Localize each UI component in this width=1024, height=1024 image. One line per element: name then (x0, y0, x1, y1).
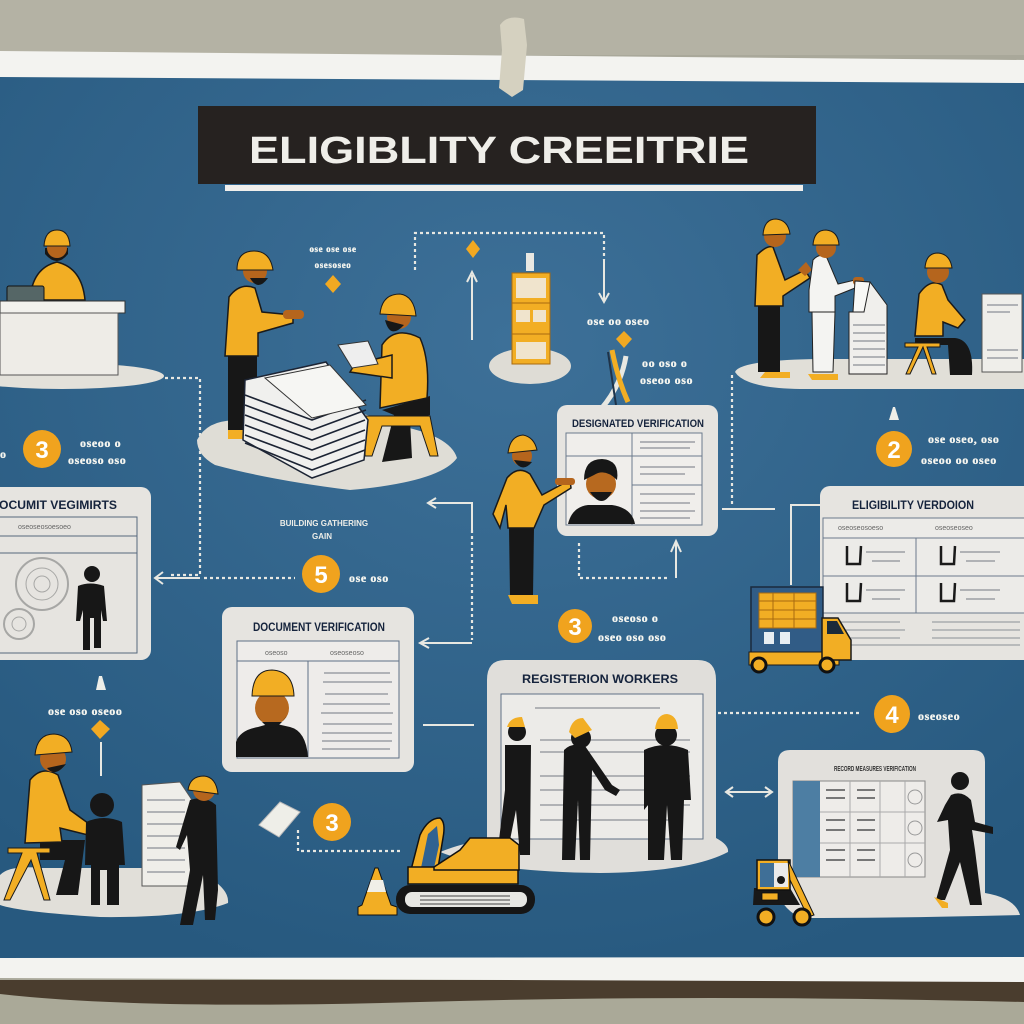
step 2 marker: ose oseo, oso (928, 432, 999, 446)
bottom-left captions and arrow (48, 676, 122, 718)
scissors tool and captions: oseoo oso (640, 373, 693, 387)
tape (499, 17, 527, 97)
panel: document verification (222, 607, 414, 772)
step 5 marker: ose oso (349, 571, 389, 585)
step 3 center marker: oseoso o (612, 611, 658, 625)
standing worker by card (493, 435, 575, 604)
excavator (396, 818, 535, 914)
step 4 marker: oseoseo (918, 709, 960, 723)
sitting worker (338, 294, 438, 462)
left step 3 marker: o (0, 447, 7, 461)
step 2 marker (876, 407, 999, 467)
connector arrows (101, 233, 862, 851)
standing silhouette worker (176, 776, 218, 925)
right three workers scene (735, 219, 1024, 389)
step 3 lower marker (313, 803, 351, 841)
traffic cone (358, 868, 397, 915)
child silhouette (85, 793, 125, 905)
panel: registration workers (440, 660, 728, 873)
small note above workers: ose ose ose (309, 244, 357, 254)
small center caption: GAIN (312, 532, 332, 541)
document (142, 782, 192, 886)
panel: worker records: RECORD MEASURES VERIFICATION (834, 766, 916, 773)
standing worker (225, 251, 304, 439)
step 3 center marker (558, 609, 667, 644)
panel: document requirements: OCUMIT VEGIMIRTS (0, 498, 117, 512)
panel: document verification: oseoso (265, 650, 288, 657)
small center caption: BUILDING GATHERING (280, 519, 368, 528)
center paper pile scene (197, 251, 457, 490)
bottom-left captions and arrow: ose oso oseoo (48, 704, 122, 718)
step 3 center marker: 3 (568, 614, 582, 641)
small note above workers: osesoseo (315, 260, 351, 270)
step 3 center marker: oseo oso oso (598, 630, 667, 644)
step 2 marker: 2 (887, 437, 901, 464)
panel: eligibility verification: oseoseosoeso (838, 525, 883, 532)
panel: designated verification: DESIGNATED VERIFICATION (572, 418, 704, 430)
title banner: ELIGIBLITY CREEITRIE (249, 130, 749, 172)
icon: person (76, 566, 107, 650)
scissors tool and captions (587, 314, 693, 409)
panel: document requirements (0, 487, 151, 660)
workers silhouettes (499, 714, 691, 860)
forklift (753, 860, 814, 925)
bottom-left workers scene (0, 734, 228, 925)
panel: document verification: DOCUMENT VERIFICATION (253, 620, 385, 634)
panel: eligibility verification: oseoseoseo (935, 525, 973, 532)
left step 3 marker (0, 430, 126, 468)
panel: eligibility verification: ELIGIBILITY VERDOION (852, 498, 974, 512)
cabinet (489, 253, 571, 384)
panel: document requirements: oseoseosoesoeo (18, 524, 71, 531)
step 4 marker: 4 (885, 702, 899, 729)
scissors tool and captions: oo oso o (642, 356, 687, 370)
panel: eligibility verification (820, 486, 1024, 660)
left desk worker scene (0, 230, 164, 389)
paper stack (243, 362, 368, 478)
small note above workers (91, 240, 632, 739)
paper note (259, 802, 300, 837)
left step 3 marker: 3 (35, 437, 49, 464)
step 5 marker: 5 (314, 562, 328, 589)
step 5 marker (302, 555, 389, 593)
step 4 marker (874, 695, 960, 733)
seated worker (4, 734, 92, 900)
delivery truck (749, 587, 851, 672)
left step 3 marker: oseoo o (80, 436, 121, 450)
panel: designated verification (557, 405, 718, 536)
walking silhouette (934, 772, 993, 908)
small center caption (280, 519, 368, 541)
panel: worker records (778, 750, 1020, 918)
panel: document verification: oseoseoso (330, 650, 364, 657)
panel: registration workers: REGISTERION WORKERS (522, 672, 678, 686)
step 3 lower marker: 3 (325, 810, 339, 837)
step 2 marker: oseoo oo oseo (921, 453, 997, 467)
title banner (198, 106, 816, 191)
left step 3 marker: oseoso oso (68, 453, 126, 467)
scissors tool and captions: ose oo oseo (587, 314, 650, 328)
